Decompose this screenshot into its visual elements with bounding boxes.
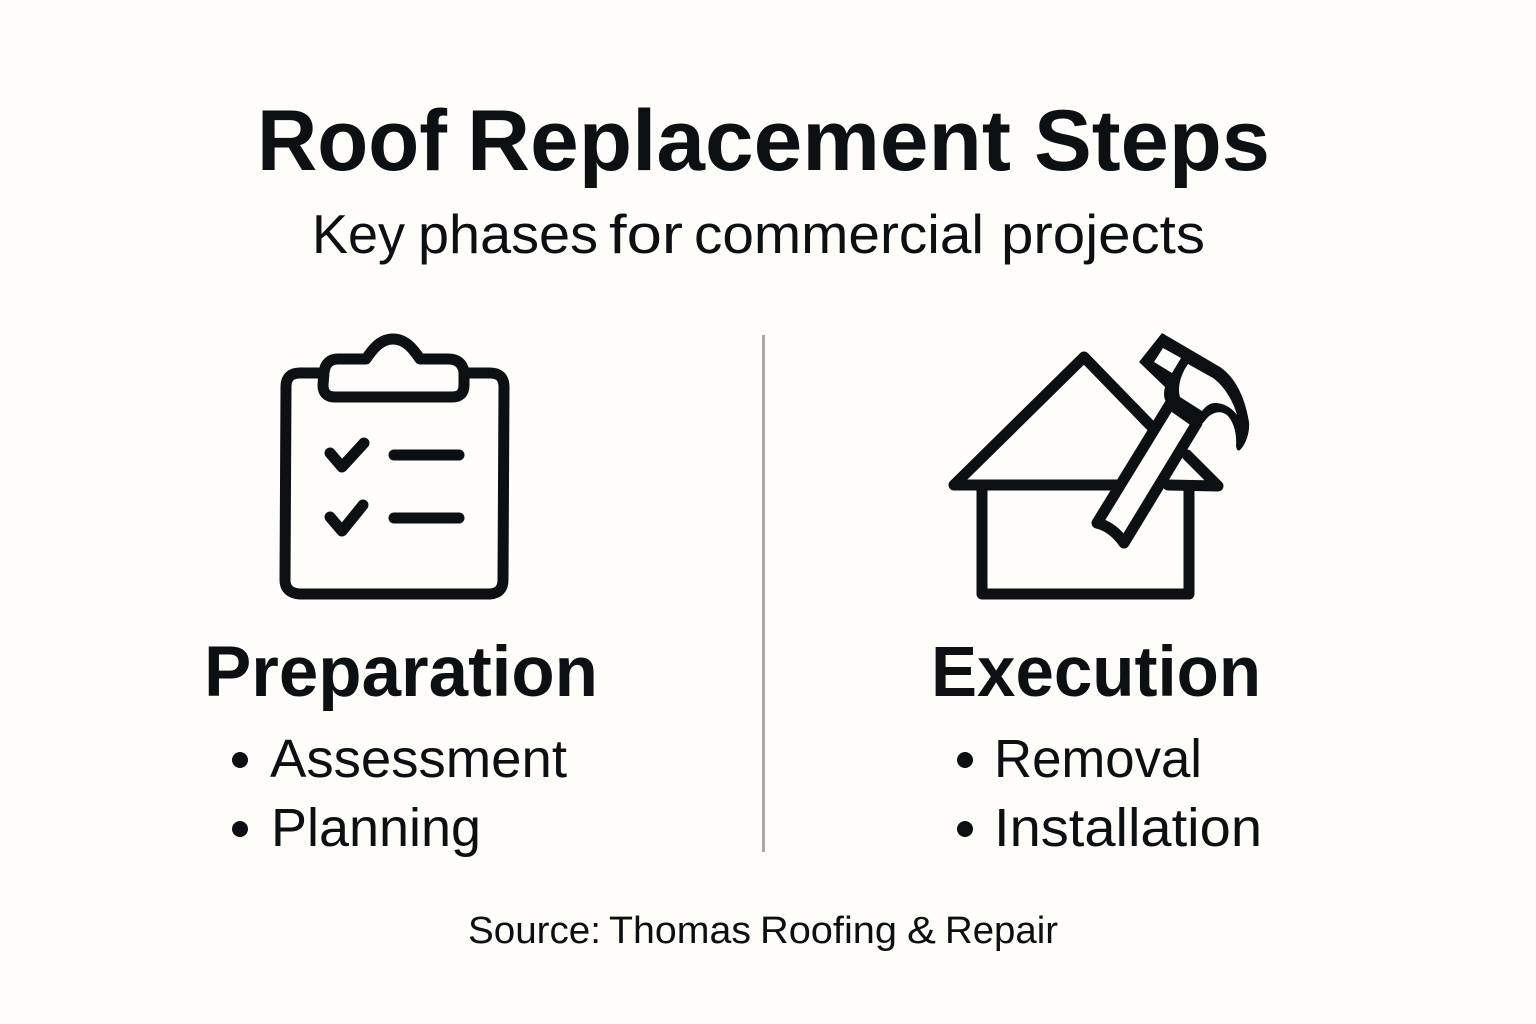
title: Steps: [1034, 93, 1270, 189]
subtitle: for: [609, 203, 683, 265]
bullet item: planning: Planning: [271, 798, 481, 858]
source note: Roofing: [760, 910, 897, 952]
subtitle: Key: [312, 203, 405, 265]
subtitle: commercial: [694, 203, 984, 265]
source note: Thomas: [609, 910, 751, 952]
source note: [468, 910, 1058, 952]
subtitle: [312, 203, 1205, 265]
source note: &: [907, 910, 936, 952]
panel: execution: [931, 633, 1262, 858]
source note: Repair: [945, 910, 1058, 952]
icon: clipboard checklist: [285, 339, 504, 594]
bullet item: assessment: Assessment: [270, 729, 567, 789]
bullet item: removal: Removal: [994, 729, 1202, 789]
icon: house with hammer: [954, 333, 1249, 594]
heading: execution: Execution: [931, 633, 1261, 712]
subtitle: projects: [1001, 203, 1205, 265]
source note: Source:: [468, 910, 601, 952]
panel: preparation: [204, 633, 598, 858]
divider: [762, 335, 765, 852]
title: [257, 93, 1270, 189]
bullet item: installation: Installation: [994, 798, 1262, 858]
subtitle: phases: [418, 203, 598, 265]
title: Replacement: [467, 93, 1011, 189]
heading: preparation: Preparation: [204, 633, 598, 712]
title: Roof: [257, 93, 447, 189]
